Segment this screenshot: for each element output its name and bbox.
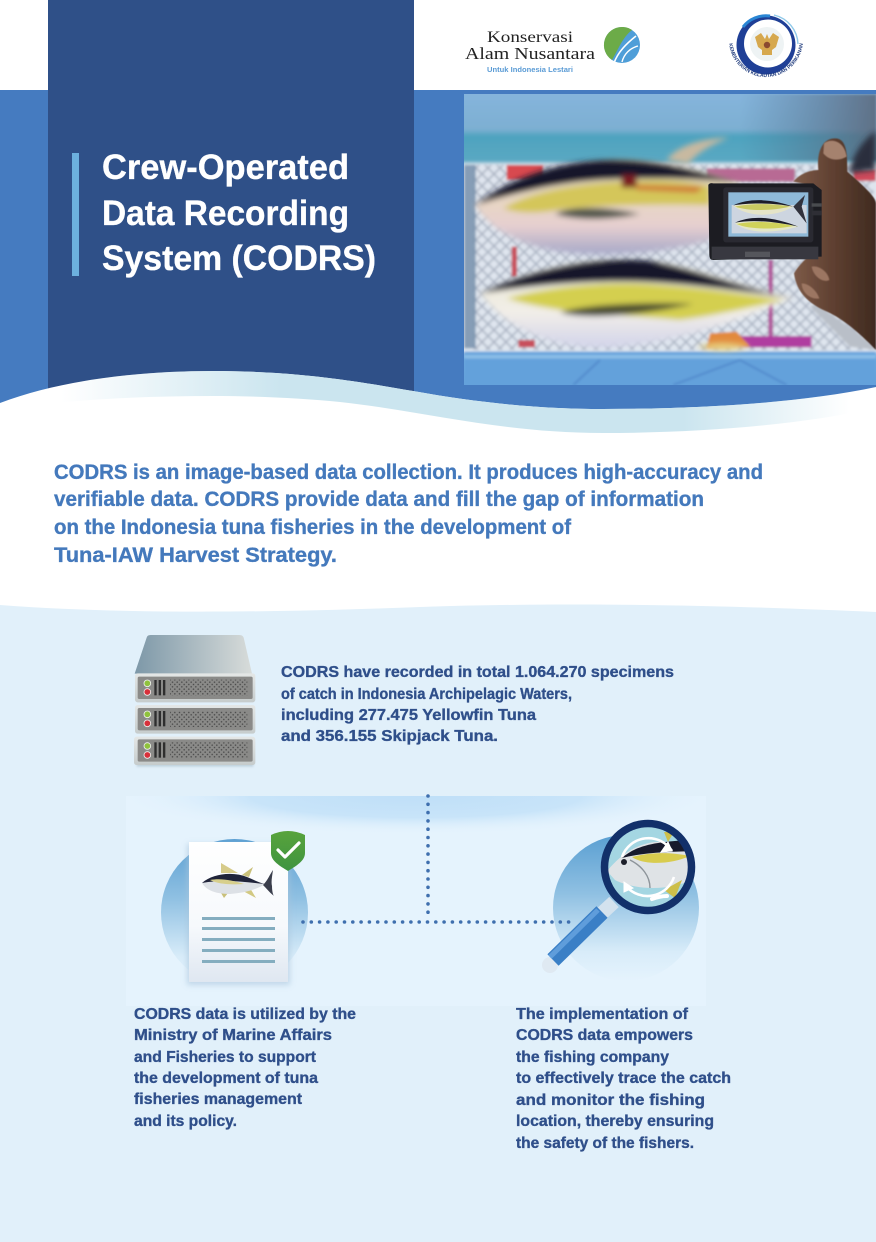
hand — [793, 138, 876, 350]
logo: Konservasi Alam Nusantara: Alam Nusantara — [465, 44, 596, 63]
intro paragraph: verifiable data. CODRS provide data and fill the gap of information — [54, 488, 704, 511]
logo: Konservasi Alam Nusantara: Untuk Indonesia Lestari — [487, 65, 573, 74]
title: Crew-Operated — [102, 148, 349, 187]
logo: Konservasi Alam Nusantara — [465, 27, 640, 74]
server statistics text: of catch in Indonesia Archipelagic Waters, — [281, 686, 572, 703]
icon: shield check — [271, 831, 305, 871]
intro paragraph — [54, 461, 763, 567]
title: Data Recording — [102, 194, 349, 233]
server statistics text — [281, 664, 674, 745]
server statistics text: and 356.155 Skipjack Tuna. — [281, 728, 498, 745]
icon: server stack — [134, 635, 255, 767]
magnifier handle — [542, 902, 614, 973]
title — [102, 148, 376, 278]
title: System (CODRS) — [102, 239, 376, 278]
logo: Kementerian Kelautan dan Perikanan — [729, 14, 803, 78]
dotted connector — [303, 796, 570, 922]
light blue lower panel — [0, 604, 876, 1242]
caption: fishing company use: The implementation of — [516, 1006, 689, 1023]
caption: ministry use: and Fisheries to support — [134, 1049, 317, 1066]
inner lighter panel with glow — [203, 796, 628, 824]
logo: Konservasi Alam Nusantara: Konservasi — [487, 29, 574, 46]
caption: fishing company use: the fishing company — [516, 1049, 669, 1066]
blue header band — [0, 90, 876, 440]
caption: fishing company use: the safety of the fishers. — [516, 1135, 694, 1152]
text lines on document — [202, 917, 275, 963]
camera — [708, 183, 822, 260]
icon: document with tuna and green shield — [161, 831, 308, 986]
caption: fishing company use: location, thereby ensuring — [516, 1113, 714, 1130]
icon: magnifying glass over tuna — [542, 823, 699, 981]
intro paragraph: on the Indonesia tuna fisheries in the development of — [54, 516, 572, 539]
magnifier lens — [604, 823, 695, 911]
caption: fishing company use: to effectively trace the catch — [516, 1070, 731, 1087]
caption: ministry use: and its policy. — [134, 1113, 237, 1130]
caption: ministry use: Ministry of Marine Affairs — [134, 1027, 332, 1044]
logo: Kementerian Kelautan dan Perikanan: KEMENTERIAN KELAUTAN DAN PERIKANAN — [729, 43, 803, 78]
caption: ministry use: fisheries management — [134, 1091, 303, 1108]
caption: ministry use: CODRS data is utilized by the — [134, 1006, 356, 1023]
server statistics text: including 277.475 Yellowfin Tuna — [281, 707, 536, 724]
caption: fishing company use: and monitor the fishing — [516, 1092, 705, 1109]
wave band — [0, 371, 876, 433]
caption: ministry use — [134, 1006, 356, 1130]
caption: fishing company use: CODRS data empowers — [516, 1027, 693, 1044]
tuna on document — [202, 863, 274, 898]
intro paragraph: CODRS is an image-based data collection. It produces high-accuracy and — [54, 461, 763, 484]
server statistics text: CODRS have recorded in total 1.064.270 specimens — [281, 664, 674, 681]
caption: fishing company use — [516, 1006, 731, 1152]
title accent bar — [72, 153, 79, 276]
title panel — [48, 0, 414, 400]
caption: ministry use: the development of tuna — [134, 1070, 318, 1087]
header white strip — [0, 0, 876, 90]
intro paragraph: Tuna-IAW Harvest Strategy. — [54, 544, 337, 567]
blurred tuna — [475, 132, 875, 350]
photo backdrop — [460, 90, 876, 390]
photo: fisher photographing two tuna with a camera — [460, 90, 876, 390]
white page background below the wave — [0, 371, 876, 620]
